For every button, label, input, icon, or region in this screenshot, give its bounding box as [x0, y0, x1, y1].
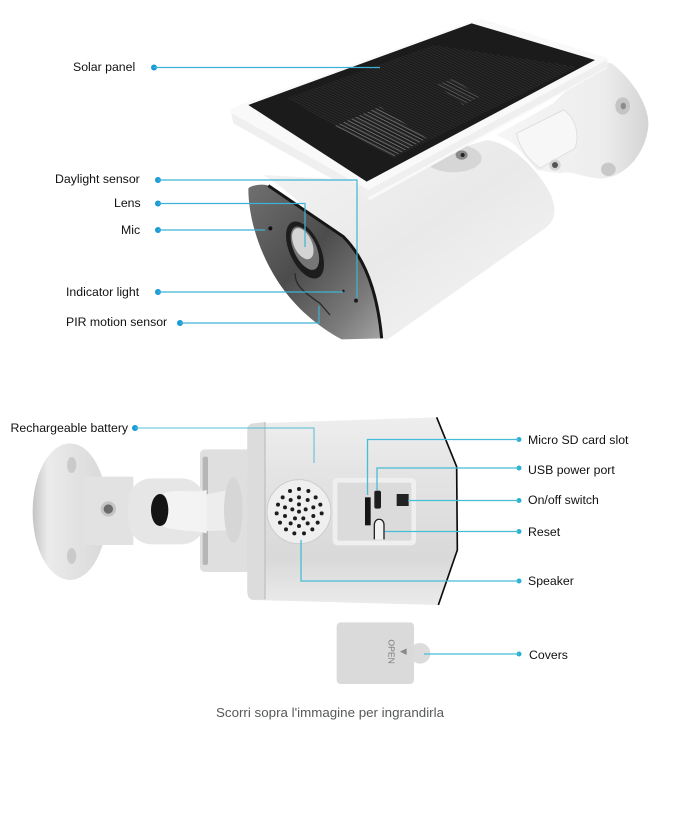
- speaker: [267, 480, 331, 544]
- callout: USB power port: USB power port: [528, 463, 615, 477]
- callout: Micro SD card slot: Micro SD card slot: [528, 433, 629, 447]
- callout: Rechargeable battery: Rechargeable battery: [10, 421, 129, 435]
- caption: Scorri sopra l'immagine per ingrandirla: [216, 705, 445, 720]
- callout: PIR motion sensor: [66, 306, 319, 329]
- callout: Indicator light: Indicator light: [66, 285, 140, 299]
- callout: Speaker: [301, 540, 574, 588]
- callout: Reset: [385, 525, 561, 539]
- cover: OPEN: [387, 639, 397, 664]
- callout: Mic: Mic: [121, 223, 140, 237]
- callout: Mic: [121, 223, 265, 237]
- callout: Daylight sensor: [55, 172, 357, 298]
- callout: Lens: Lens: [114, 196, 141, 210]
- bottom camera illustration: [33, 417, 457, 684]
- callout: Solar panel: [73, 60, 380, 74]
- wall mount: [497, 60, 648, 178]
- callout: Speaker: Speaker: [528, 574, 574, 588]
- callout: Micro SD card slot: [368, 433, 629, 495]
- solar panel: [230, 18, 608, 200]
- callout: Indicator light: [66, 285, 343, 299]
- port compartment: [333, 478, 416, 545]
- cover: [337, 622, 430, 684]
- camera body: [263, 140, 554, 340]
- camera body side: [247, 417, 457, 605]
- top camera illustration: [230, 18, 648, 340]
- callout: On/off switch: On/off switch: [528, 493, 599, 507]
- callout: USB power port: [377, 463, 615, 490]
- shadowed pivot under panel: [425, 144, 482, 172]
- callout: Reset: Reset: [528, 525, 561, 539]
- wall mount and arm: [33, 443, 253, 580]
- callout: Rechargeable battery: [10, 421, 314, 463]
- callout: Covers: [424, 648, 568, 662]
- callout: Covers: Covers: [529, 648, 568, 662]
- callout: On/off switch: [408, 493, 599, 507]
- lens: [278, 216, 332, 284]
- camera front face: [248, 185, 382, 339]
- callout: PIR motion sensor: PIR motion sensor: [66, 315, 167, 329]
- callout: Daylight sensor: Daylight sensor: [55, 172, 140, 186]
- callout: Solar panel: Solar panel: [73, 60, 135, 74]
- callout: Lens: [114, 196, 305, 247]
